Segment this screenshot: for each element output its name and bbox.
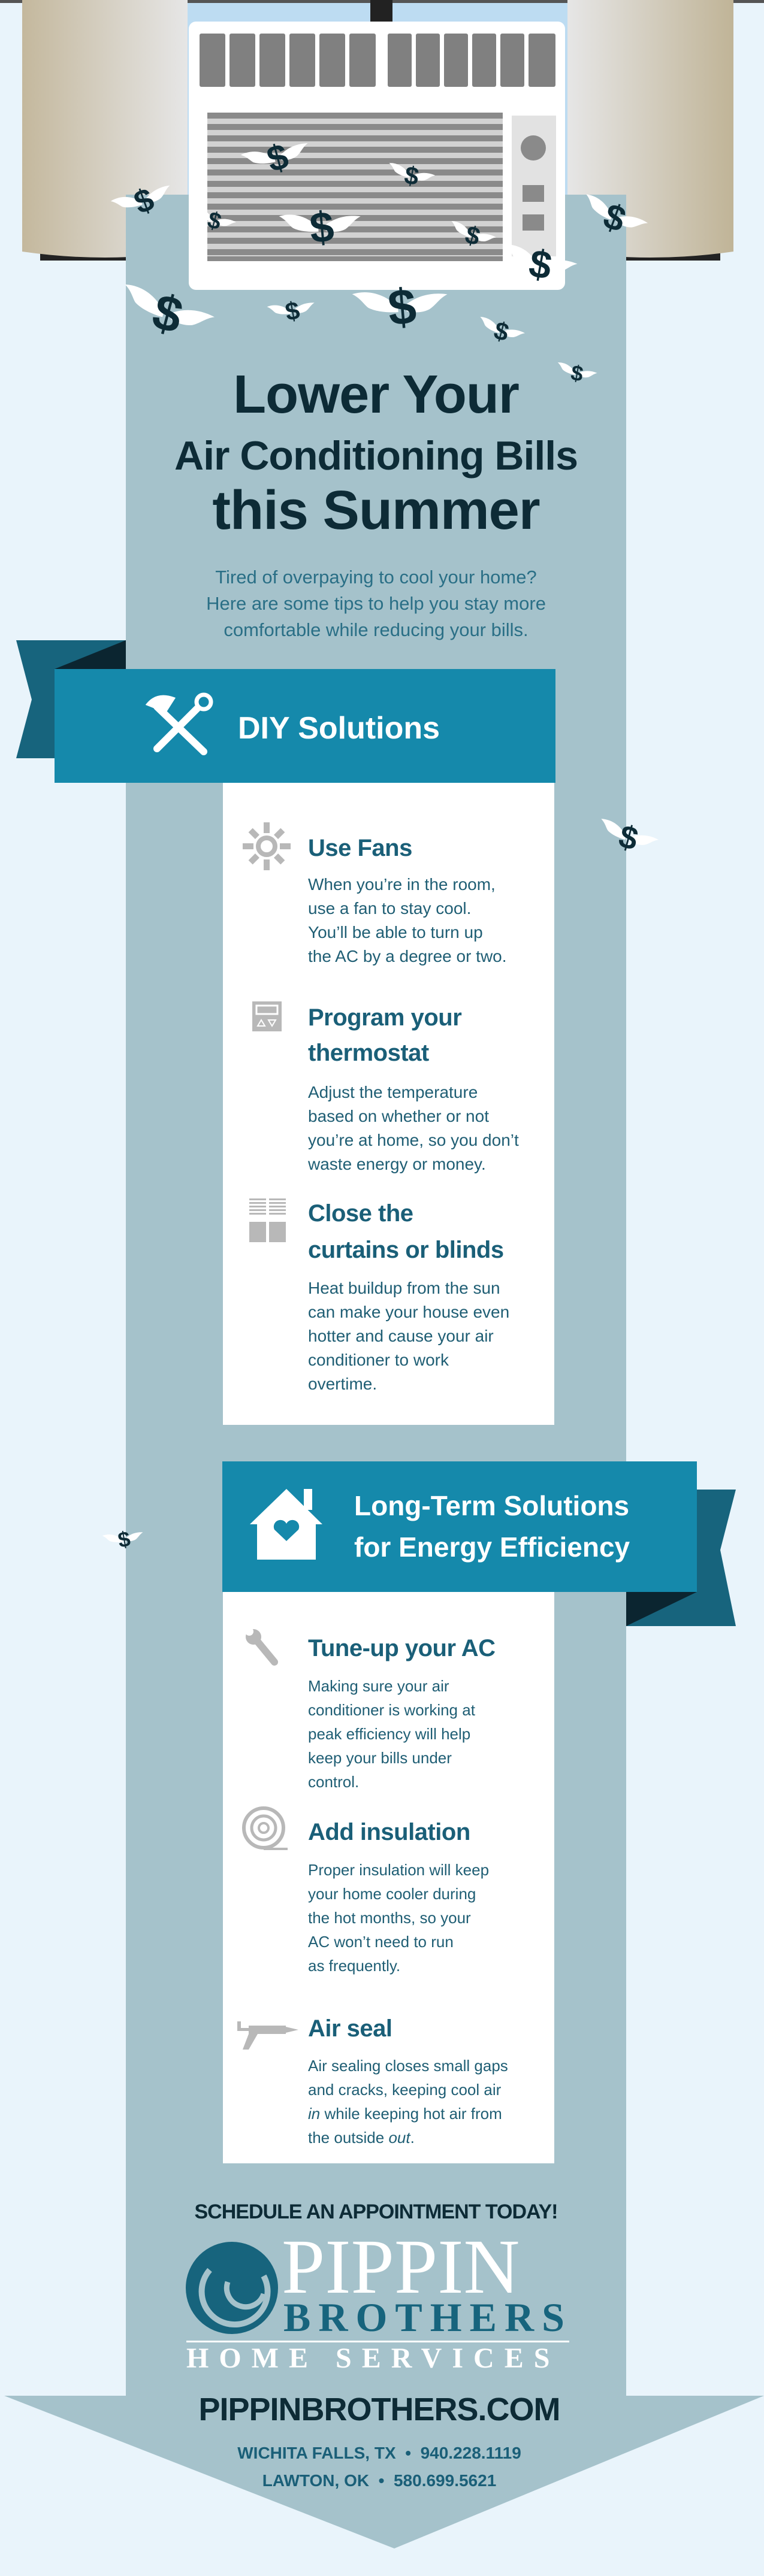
logo text: BROTHERS [283,2295,572,2340]
tip: insulation [308,1819,489,1975]
flying dollars: $ [599,195,631,240]
tip: curtains: Close the [308,1200,413,1227]
flying dollars: $ [463,220,483,251]
tip: tune-up: Tune-up your AC [308,1635,495,1661]
flying dollars: $ [386,278,418,336]
flying dollars: $ [615,818,642,858]
tip: thermostat [308,1004,519,1173]
flying dollars: $ [308,203,336,253]
tip: thermostat: waste energy or money. [308,1155,486,1173]
tip: curtains: curtains or blinds [308,1237,504,1263]
card: DIY [223,783,554,1425]
subtitle: comfortable while reducing your bills. [224,619,529,640]
flying dollars: $ [402,161,421,190]
tip: tune-up: control. [308,1773,359,1791]
tip: insulation: AC won’t need to run [308,1933,454,1951]
icon: thermostat [252,1001,282,1031]
icon: wrench [245,1627,274,1662]
tip: air seal: in while keeping hot air from [308,2105,502,2123]
icon: caulk gun [237,2021,298,2050]
tip: insulation: Add insulation [308,1819,470,1845]
tip: curtains: hotter and cause your air [308,1327,494,1345]
ribbon: long-term [222,1461,736,1626]
left curtain [22,0,188,261]
title: Air Conditioning Bills [174,433,578,479]
tip: thermostat: thermostat [308,1040,429,1066]
flying dollars: $ [116,1526,132,1552]
logo text [186,2224,572,2374]
subtitle [206,567,546,640]
tip: curtains [308,1200,509,1393]
tip: insulation: as frequently. [308,1957,400,1975]
flying dollars: $ [205,207,224,235]
icon: tools [147,695,211,752]
tip: tune-up: keep your bills under [308,1749,452,1767]
tip: tune-up: conditioner is working at [308,1701,475,1719]
tip: air seal: Air sealing closes small gaps [308,2057,508,2075]
tip: use fans: use a fan to stay cool. [308,899,471,918]
locations: LAWTON, OK • 580.699.5621 [262,2471,496,2490]
tip: insulation: your home cooler during [308,1885,476,1903]
tip: air seal [308,2015,508,2147]
locations: WICHITA FALLS, TX • 940.228.1119 [237,2444,521,2462]
tip: thermostat: based on whether or not [308,1107,489,1125]
tip: tune-up [308,1635,495,1791]
tip: thermostat: Adjust the temperature [308,1083,478,1101]
flying dollars: $ [262,136,292,180]
heading: DIY Solutions: DIY Solutions [238,711,440,746]
heading: Long-Term Solutions: for Energy Efficiency [354,1531,630,1563]
icon: house heart [250,1489,322,1560]
heading: Long-Term Solutions: Long-Term Solutions [354,1490,629,1521]
tip: use fans: the AC by a degree or two. [308,947,507,965]
title: Lower Your [233,365,519,425]
subtitle: Tired of overpaying to cool your home? [215,567,537,588]
tip: air seal: and cracks, keeping cool air [308,2081,501,2099]
flying dollars: $ [283,296,302,326]
tip: curtains: Heat buildup from the sun [308,1279,500,1297]
flying dollars [101,130,662,1555]
title [174,365,578,541]
tip: insulation: Proper insulation will keep [308,1861,489,1879]
logo text: PIPPIN [282,2224,520,2310]
tip: use fans: Use Fans [308,835,412,861]
tip: curtains: overtime. [308,1375,377,1393]
tip: air seal: Air seal [308,2015,392,2042]
title: this Summer [212,480,540,541]
tip: insulation: the hot months, so your [308,1909,471,1927]
tip: use fans [308,835,507,965]
tip: curtains: can make your house even [308,1303,509,1321]
tip: thermostat: you’re at home, so you don’t [308,1131,519,1149]
air conditioner [189,22,565,290]
flying dollars: $ [526,240,555,288]
tip: tune-up: peak efficiency will help [308,1725,470,1743]
website: PIPPINBROTHERS.COM [198,2392,560,2427]
tip: use fans: When you’re in the room, [308,875,496,894]
ribbon: DIY [16,640,555,783]
subtitle: Here are some tips to help you stay more [206,593,546,614]
tip: thermostat: Program your [308,1004,461,1031]
right curtain [567,0,733,261]
icon: fan [234,814,299,879]
heading: Long-Term Solutions [354,1490,630,1563]
card: long-term [223,1592,554,2163]
flying dollars: $ [129,181,159,221]
call to action: SCHEDULE AN APPOINTMENT TODAY! [194,2200,557,2223]
icon: insulation roll [244,1808,288,1849]
locations [237,2444,521,2490]
logo text: HOME SERVICES [186,2342,560,2374]
flying dollars: $ [569,360,585,386]
tip: tune-up: Making sure your air [308,1677,449,1695]
logo swirl [186,2242,569,2342]
flying dollars: $ [147,283,189,344]
tip: use fans: You’ll be able to turn up [308,923,483,942]
flying dollars: $ [491,316,512,347]
tip: air seal: the outside out. [308,2129,415,2147]
tip: curtains: conditioner to work [308,1351,449,1369]
window sky [188,0,567,255]
icon: blinds [249,1198,286,1242]
